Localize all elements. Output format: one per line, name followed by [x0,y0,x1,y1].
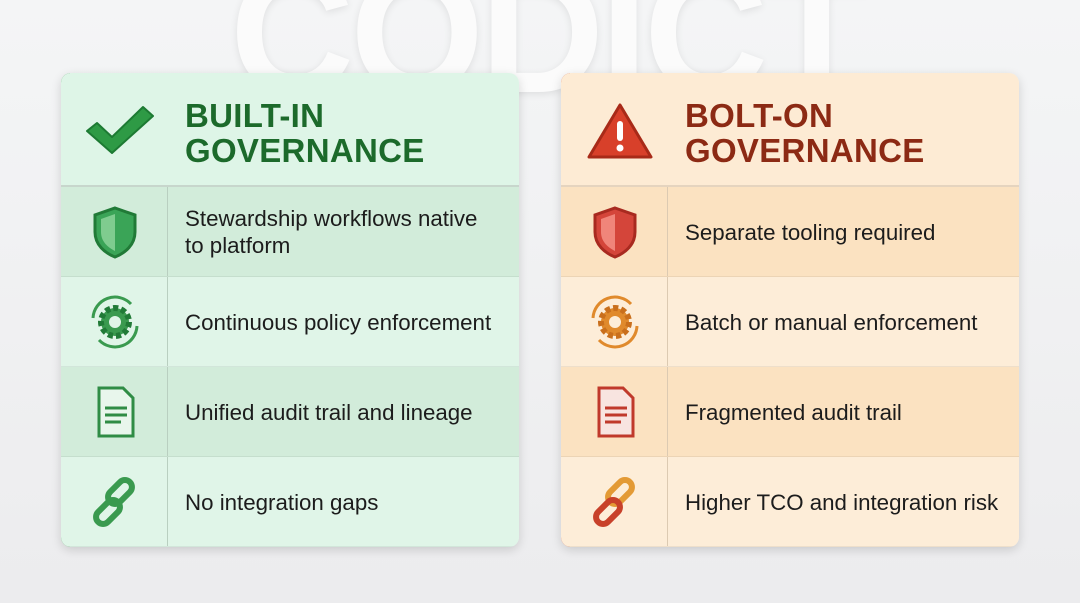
header: built-in [61,73,519,187]
heading: GOVERNANCE [685,132,925,169]
row 4 [61,457,519,547]
panel: built-in governance [61,73,519,547]
row 3 [561,367,1019,457]
heading [685,97,925,169]
row 1: Separate tooling required [685,220,935,244]
row 3: Unified audit trail and lineage [185,400,473,424]
row 4 [561,457,1019,547]
row 3 [61,367,519,457]
row 3: Fragmented audit trail [685,400,902,424]
row 4: No integration gaps [185,490,378,514]
icon: checkmark [86,106,154,154]
row 1 [561,187,1019,277]
row 2: Batch or manual enforcement [685,310,978,334]
panel: bolt-on governance [561,73,1019,547]
row 4: Higher TCO and integration risk [685,490,998,514]
row 1 [61,187,519,277]
row 2 [61,277,519,367]
row 2 [561,277,1019,367]
header: bolt-on [561,73,1019,187]
heading: GOVERNANCE [185,132,425,169]
heading [185,97,425,169]
heading: BUILT-IN [185,97,324,134]
row 1: Stewardship workflows native to platform [185,206,477,258]
heading: BOLT-ON [685,97,833,134]
icon: warning [588,103,653,158]
row 2: Continuous policy enforcement [185,310,491,334]
